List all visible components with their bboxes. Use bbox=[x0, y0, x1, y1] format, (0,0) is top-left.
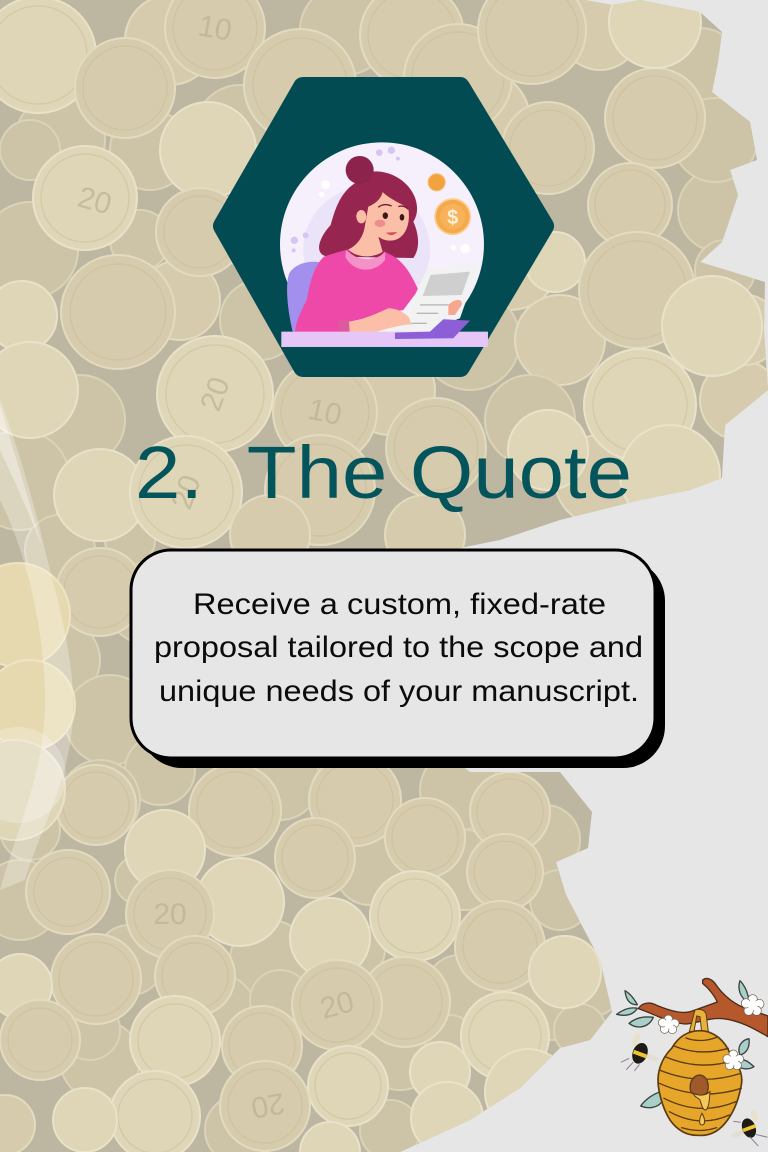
coin pile background with torn edge: 20 bbox=[165, 471, 208, 513]
bee left bbox=[619, 1031, 666, 1079]
document bbox=[377, 262, 480, 332]
desk bbox=[281, 332, 488, 347]
hexagon icon bbox=[223, 87, 544, 367]
coin pile background with torn edge: 20 bbox=[317, 985, 358, 1026]
translucent glare on left edge bbox=[0, 400, 73, 890]
hive body bbox=[658, 1031, 742, 1135]
icon: beehive on branch with bees bbox=[617, 978, 768, 1152]
coin: large dollar: $ bbox=[447, 207, 458, 229]
coin: small bbox=[428, 174, 445, 191]
leaves bbox=[617, 981, 754, 1108]
sweater bbox=[295, 249, 418, 337]
coin pile background with torn edge: 20 bbox=[153, 898, 187, 931]
card shadow bbox=[140, 559, 665, 768]
branch bbox=[638, 978, 768, 1037]
coin pile background with torn edge: 10 bbox=[305, 393, 345, 432]
hanging strap bbox=[689, 1009, 708, 1032]
coin pile background with torn edge: 10 bbox=[196, 9, 234, 48]
text card bbox=[131, 550, 665, 768]
card panel bbox=[131, 550, 655, 758]
hand bbox=[349, 308, 413, 335]
chair bbox=[287, 262, 333, 333]
bee right bbox=[725, 1108, 768, 1152]
title: 2. The Quote bbox=[135, 431, 632, 514]
hair bbox=[319, 171, 418, 258]
illustration: woman reviewing a quote bbox=[280, 142, 488, 347]
card text: proposal tailored to the scope and bbox=[154, 631, 643, 664]
coin: large dollar bbox=[435, 199, 470, 234]
hive door and honey drip bbox=[690, 1075, 710, 1125]
coin pile background with torn edge: 20 bbox=[74, 181, 115, 221]
laptop bbox=[395, 319, 470, 339]
flowers bbox=[658, 995, 764, 1070]
card text: unique needs of your manuscript. bbox=[159, 675, 639, 708]
card text bbox=[154, 588, 643, 708]
coin pile background with torn edge: 20 bbox=[194, 373, 237, 415]
coin pile background with torn edge: 20 bbox=[249, 1086, 287, 1124]
hive bands bbox=[659, 1037, 741, 1130]
card text: Receive a custom, fixed-rate bbox=[193, 588, 606, 621]
face and neck bbox=[348, 192, 409, 256]
hexagon badge bbox=[223, 87, 544, 367]
